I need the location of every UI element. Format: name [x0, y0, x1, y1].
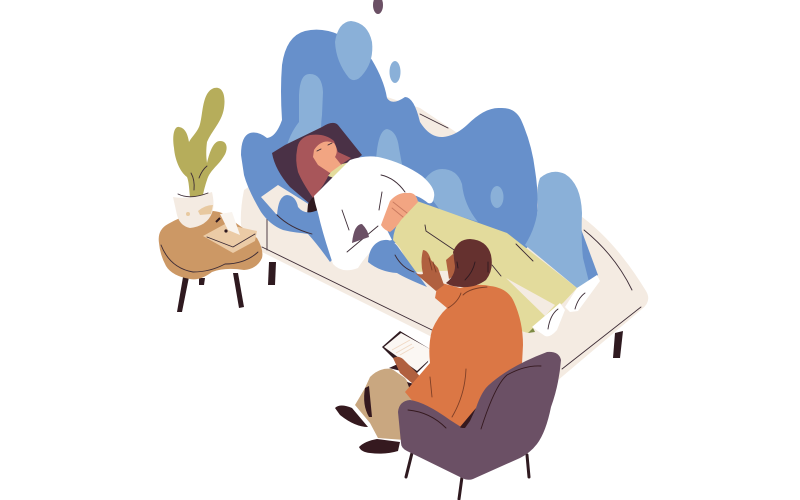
potted plant [173, 88, 227, 228]
raised hand [415, 250, 444, 291]
side table [159, 211, 262, 312]
front shoe [359, 439, 400, 454]
trousers beige [355, 369, 420, 440]
blue thought cloud [241, 21, 598, 288]
hands [381, 193, 418, 232]
face [446, 254, 458, 279]
therapist [335, 239, 523, 454]
blue lobe over legs [368, 240, 427, 287]
couch legs [268, 262, 623, 358]
tissue box [203, 212, 257, 253]
armchair [398, 352, 561, 499]
socks [532, 303, 565, 336]
trousers [393, 201, 577, 333]
pillow [272, 123, 362, 204]
collar [328, 162, 351, 180]
couch [241, 97, 648, 381]
face [313, 142, 343, 173]
tablet [382, 331, 430, 373]
couch seat cushion [261, 185, 310, 216]
holding hand [393, 357, 423, 384]
blouse shadow [352, 224, 369, 243]
orange sweater [405, 282, 523, 435]
white blouse [314, 156, 434, 270]
patient [272, 123, 600, 336]
back shoe [335, 406, 368, 427]
hair [296, 135, 351, 198]
falling drop [373, 0, 383, 14]
foreground cloud lobe [277, 195, 332, 262]
hair [446, 239, 492, 287]
